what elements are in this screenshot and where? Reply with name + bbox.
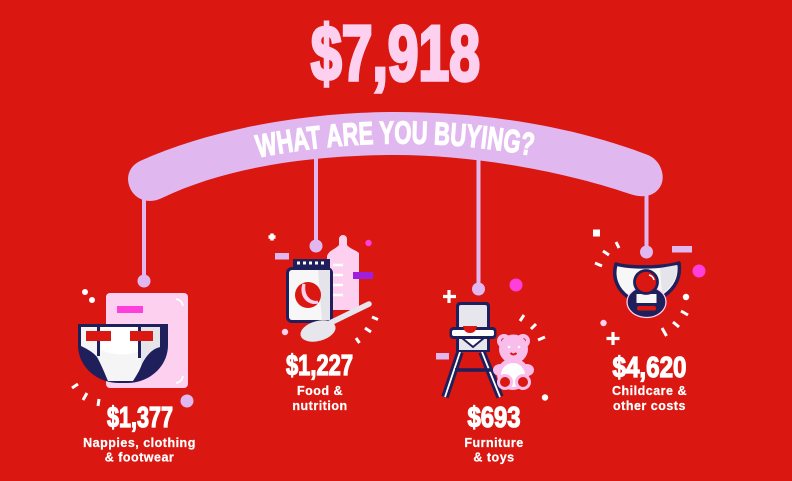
decoration: dots and ticks — [436, 278, 548, 401]
icon: high chair — [445, 282, 500, 397]
label: other costs — [613, 399, 686, 413]
label: Childcare & — [612, 384, 687, 398]
banner text: WHAT ARE YOU BUYING? — [254, 120, 534, 158]
label: & toys — [473, 450, 515, 464]
icon: teddy bear — [493, 334, 534, 390]
label: Food & — [297, 384, 343, 398]
panel: food — [268, 234, 378, 413]
panel: nappies — [72, 274, 196, 464]
icon: nappy packet and nappy — [78, 274, 188, 388]
label: & footwear — [105, 450, 174, 464]
icon: dummy — [615, 246, 679, 318]
decoration: dots and ticks — [72, 289, 194, 408]
curved banner — [128, 112, 663, 201]
amount: $1,227 — [286, 350, 353, 382]
title: total cost: $7,918 — [311, 9, 480, 97]
label: nutrition — [292, 399, 348, 413]
amount: $4,620 — [612, 352, 686, 384]
panel: furniture — [436, 278, 548, 464]
label: Furniture — [464, 436, 524, 450]
amount: $693 — [468, 402, 520, 434]
amount: $1,377 — [107, 402, 173, 434]
decoration: dots and ticks — [593, 230, 706, 345]
connector stems — [144, 150, 646, 289]
label: Nappies, clothing — [83, 436, 196, 450]
decoration: dots and ticks — [268, 234, 378, 343]
panel: childcare — [593, 230, 706, 413]
icon: bottle, jar and spoon — [286, 235, 373, 345]
